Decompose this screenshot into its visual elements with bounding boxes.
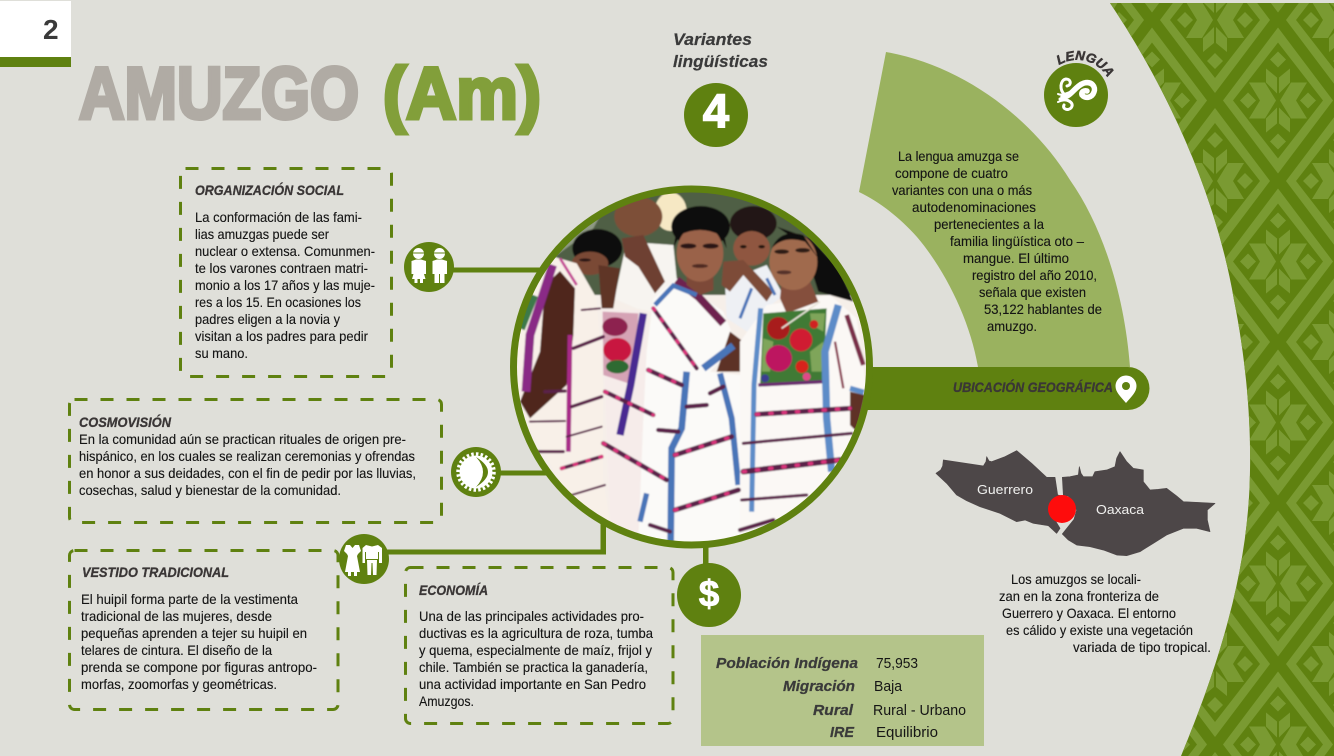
lengua text: variantes con una o más (892, 182, 1032, 198)
connector lines (385, 268, 708, 570)
organización text: res a los 15. En ocasiones los (195, 294, 361, 310)
lengua text: familia lingüística oto – (950, 233, 1084, 249)
panel: cosmovisión: COSMOVISIÓN (79, 413, 172, 430)
map: Guerrero and Oaxaca: Oaxaca (1096, 502, 1145, 517)
statistic labels (716, 655, 858, 741)
statistic values: Rural - Urbano (873, 702, 966, 719)
lengua text: registro del año 2010, (972, 267, 1097, 283)
economía text (419, 608, 653, 709)
organización text: padres eligen a la novia y (195, 311, 340, 327)
second woman's dress (602, 308, 647, 535)
heading: variantes lingüísticas (673, 30, 768, 71)
right woman (777, 227, 853, 302)
icon: dollar (677, 563, 741, 627)
icon: sun and moon (451, 447, 501, 497)
lengua text: La lengua amuzga se (898, 148, 1019, 164)
ubicación geográfica bar: UBICACIÓN GEOGRÁFICA (953, 378, 1113, 395)
lengua text: pertenecientes a la (934, 216, 1044, 232)
title: (Am) (383, 54, 541, 134)
cosmovisión text (79, 431, 416, 498)
statistic labels: Población Indígena (716, 655, 858, 672)
far-left woman head (572, 229, 622, 268)
statistic values: Baja (874, 678, 903, 695)
panel: economía (406, 568, 673, 724)
badge: number of variants (684, 83, 748, 147)
text: location description (999, 571, 1211, 655)
economía text: ductivas es la agricultura de roza, tumba (419, 625, 653, 641)
panel: cosmovisión (70, 400, 442, 522)
organización text: nuclear o extensa. Comunmen- (195, 243, 375, 259)
panel: economía: ECONOMÍA (419, 582, 488, 598)
statistic labels: Rural (813, 702, 854, 719)
organización text: te los varones contraen matri- (195, 260, 368, 276)
economía text: una actividad importante en San Pedro (419, 676, 646, 692)
back man (614, 242, 678, 296)
lengua text: señala que existen (979, 284, 1086, 300)
icon: lengua: LENGUA (1056, 50, 1114, 78)
cosmovisión text: cosechas, salud y bienestar de la comunidad. (79, 482, 341, 498)
page number tab: 2 (43, 14, 59, 45)
page number tab (0, 1, 71, 67)
economía text: Una de las principales actividades pro- (419, 608, 644, 624)
photo: Amuzgo women in huipiles (510, 185, 875, 550)
icon: dollar: $ (699, 573, 720, 614)
statistic values (873, 655, 966, 741)
organización text: La conformación de las fami- (195, 209, 362, 225)
statistics table (701, 635, 984, 746)
vestido text: prenda se compone por figuras antropo- (81, 659, 317, 675)
statistic values: Equilibrio (876, 724, 938, 741)
lengua text: autodenominaciones (912, 199, 1036, 215)
vestido text: pequeñas aprenden a tejer su huipil en (81, 625, 307, 641)
economía text: Amuzgos. (419, 693, 474, 709)
vestido text: tradicional de las mujeres, desde (81, 608, 272, 624)
lengua text: amuzgo. (987, 318, 1037, 334)
vestido text (81, 591, 317, 692)
lengua text: compone de cuatro (895, 165, 1008, 181)
ubicación geográfica bar (860, 367, 1150, 410)
text: location description: Guerrero y Oaxaca. El entorno (1002, 605, 1176, 621)
vestido text: telares de cintura. El diseño de la (81, 642, 272, 658)
textile pattern band (1110, 3, 1334, 756)
panel: organización social (180, 168, 392, 376)
child (725, 265, 783, 333)
organización text (195, 209, 375, 361)
cosmovisión text: En la comunidad aún se practican rituales de origen pre- (79, 431, 406, 447)
centre woman (638, 278, 742, 542)
panel: vestido tradicional (70, 550, 338, 710)
organización text: su mano. (195, 345, 248, 361)
map: Guerrero and Oaxaca: Guerrero (977, 482, 1033, 497)
heading: variantes lingüísticas: Variantes (673, 30, 752, 49)
vestido text: morfas, zoomorfas y geométricas. (81, 676, 277, 692)
lengua text (892, 148, 1102, 334)
lengua wedge panel (859, 52, 1130, 367)
icon: traditional clothing (339, 534, 389, 584)
text: location description: es cálido y existe una vegetación (1006, 622, 1193, 638)
statistic values: 75,953 (876, 655, 918, 672)
statistic labels: Migración (783, 678, 855, 695)
organización text: lias amuzgas puede ser (195, 226, 329, 242)
economía text: y quema, especialmente de maíz, frijol y (419, 642, 652, 658)
icon: lengua (1044, 50, 1114, 127)
map: Guerrero and Oaxaca (936, 451, 1215, 556)
badge: number of variants: 4 (703, 84, 729, 137)
text: location description: Los amuzgos se locali- (1011, 571, 1141, 587)
cosmovisión text: hispánico, en los cuales se realizan ceremonias y ofrendas (79, 448, 415, 464)
organización text: monio a los 17 años y las muje- (195, 277, 375, 293)
title: AMUZGO (79, 54, 359, 134)
organización text: visitan a los padres para pedir (195, 328, 368, 344)
panel: organización social: ORGANIZACIÓN SOCIAL (195, 181, 344, 198)
cosmovisión text: en honor a sus deidades, con el fin de pedir por las lluvias, (79, 465, 416, 481)
panel: vestido tradicional: VESTIDO TRADICIONAL (82, 564, 229, 580)
statistic labels: IRE (830, 724, 855, 741)
embroidered stripes (530, 308, 852, 532)
icon: people (404, 242, 454, 292)
text: location description: variada de tipo tropical. (1073, 639, 1211, 655)
icon: location pin (1116, 376, 1136, 403)
vestido text: El huipil forma parte de la vestimenta (81, 591, 298, 607)
text: location description: zan en la zona fronteriza de (999, 588, 1159, 604)
economía text: chile. También se practica la ganadería, (419, 659, 648, 675)
lengua text: 53,122 hablantes de (984, 301, 1102, 317)
far-left shawl (532, 256, 596, 296)
lengua text: mangue. El último (963, 250, 1069, 266)
heading: variantes lingüísticas: lingüísticas (673, 52, 768, 71)
